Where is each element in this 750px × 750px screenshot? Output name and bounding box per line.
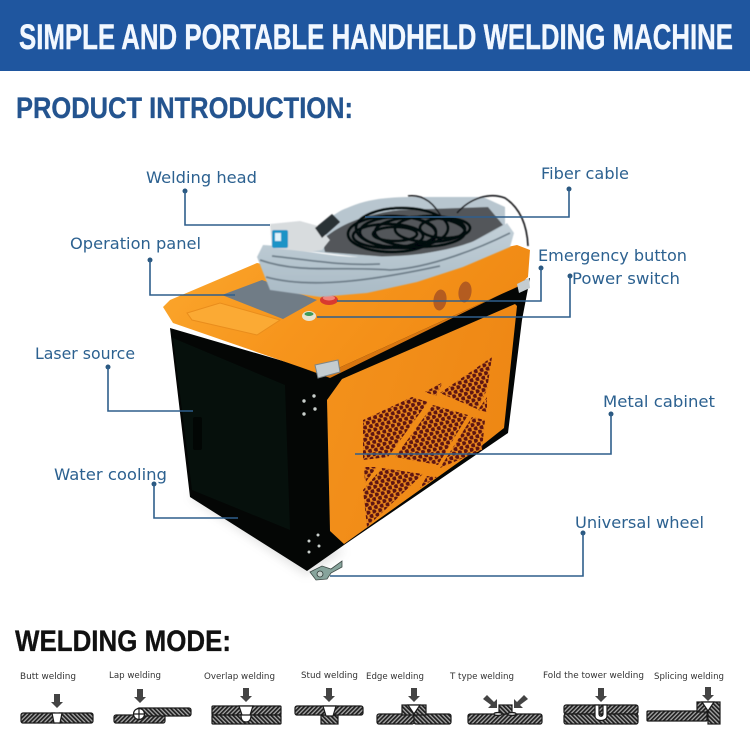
callout: laser source: Laser source <box>35 344 135 363</box>
callout: metal cabinet <box>355 392 715 454</box>
universal wheel <box>310 561 342 580</box>
stud welding <box>295 671 363 724</box>
callout: metal cabinet: Metal cabinet <box>603 392 715 411</box>
lap welding <box>109 671 191 723</box>
fiber cable coil <box>257 196 528 297</box>
overlap welding: Overlap welding <box>204 672 275 682</box>
t type welding: T type welding <box>449 672 514 682</box>
header banner <box>0 0 750 71</box>
handle recess <box>187 303 280 335</box>
callout: universal wheel: Universal wheel <box>575 513 704 532</box>
callout: fiber cable <box>365 164 629 217</box>
operation panel cover <box>222 280 317 319</box>
metal brackets <box>315 278 530 378</box>
power switch <box>302 311 316 321</box>
back of hose loop <box>300 197 513 262</box>
orange lid <box>163 245 530 378</box>
butt welding <box>20 672 93 723</box>
callout: universal wheel <box>330 513 704 576</box>
edge welding: Edge welding <box>366 672 424 682</box>
corner screws <box>302 394 320 554</box>
callout: power switch <box>317 269 680 317</box>
black cabinet body <box>170 278 530 571</box>
door latch <box>193 417 202 450</box>
emergency button <box>320 295 338 305</box>
callout: water cooling: Water cooling <box>54 465 167 484</box>
fold the tower welding: Fold the tower welding <box>543 671 644 681</box>
fan vents on lid <box>432 281 473 311</box>
black coiled cables <box>348 208 470 252</box>
coil interior <box>322 207 503 258</box>
overlap welding <box>204 672 281 724</box>
heading: product introduction: PRODUCT INTRODUCTION: <box>16 92 353 125</box>
callout: welding head: Welding head <box>146 168 257 187</box>
callout: welding head <box>146 168 270 225</box>
heading: welding mode: WELDING MODE: <box>15 625 231 658</box>
stud welding: Stud welding <box>301 671 358 681</box>
callout: power switch: Power switch <box>572 269 680 288</box>
splicing welding <box>647 672 724 724</box>
butt welding: Butt welding <box>20 672 76 682</box>
callout: water cooling <box>54 465 238 518</box>
callout: operation panel <box>70 234 235 295</box>
lap welding: Lap welding <box>109 671 161 681</box>
callout: fiber cable: Fiber cable <box>541 164 629 183</box>
fold the tower welding <box>543 671 644 724</box>
callout: operation panel: Operation panel <box>70 234 201 253</box>
orange side panel with vents <box>327 304 517 544</box>
front hose band <box>257 223 514 297</box>
welding head <box>270 214 340 252</box>
t type welding <box>449 672 542 724</box>
welding machine illustration <box>163 196 530 580</box>
splicing welding: Splicing welding <box>654 672 724 682</box>
callout: emergency button <box>337 246 687 301</box>
welding mode diagrams <box>20 671 724 724</box>
callout: laser source <box>35 344 193 411</box>
edge welding <box>366 672 451 724</box>
callout: emergency button: Emergency button <box>538 246 687 265</box>
